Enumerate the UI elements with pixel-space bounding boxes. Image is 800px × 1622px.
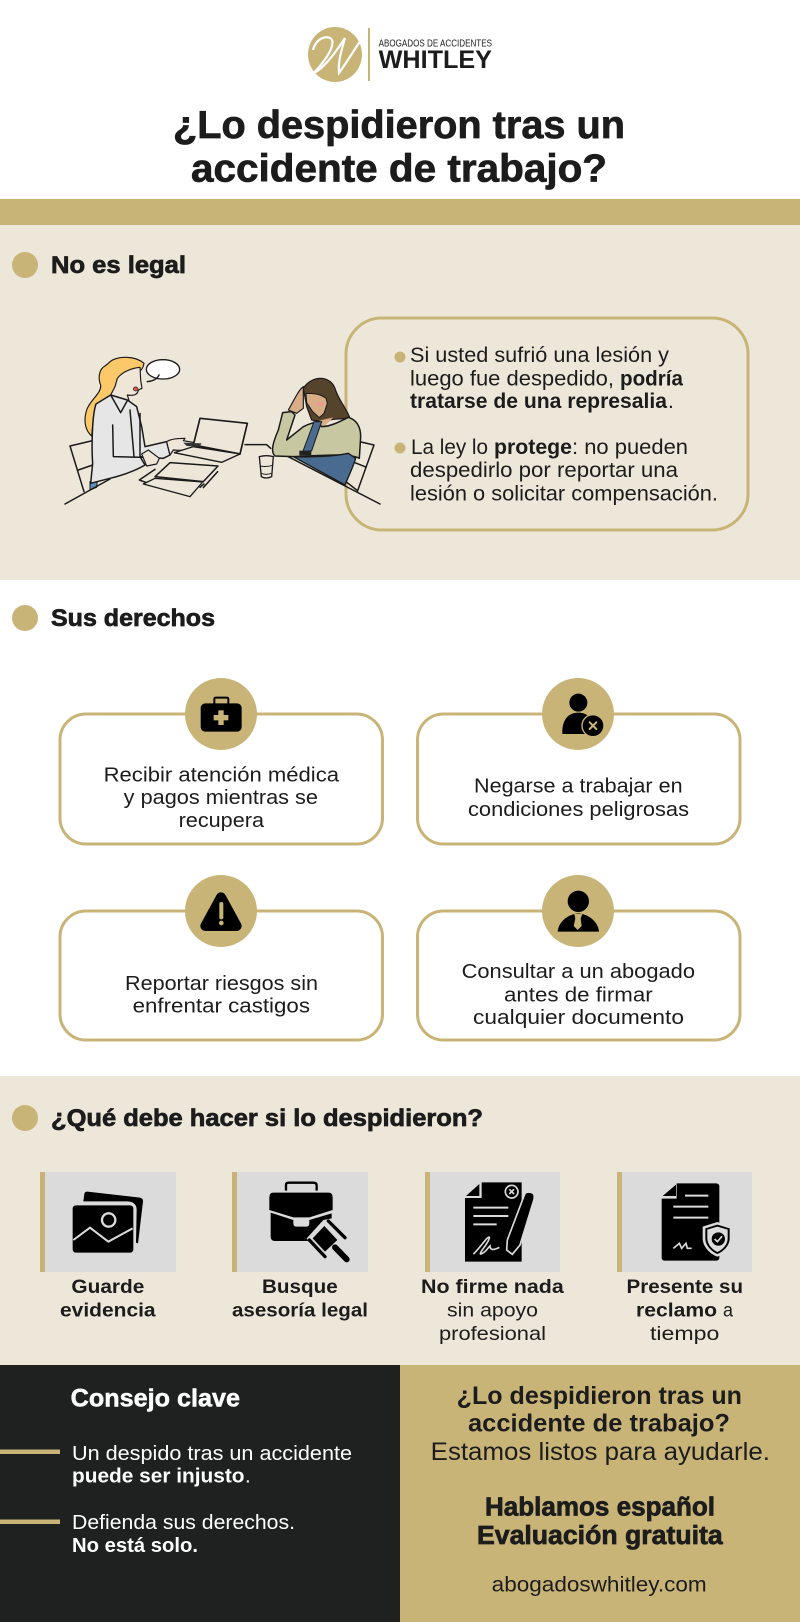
card: condiciones peligrosas [418, 678, 740, 844]
icon: document with pen [465, 1182, 534, 1262]
panel: consejo clave: Un despido tras un accidente [72, 1442, 352, 1465]
card: consultar abogado: Consultar a un abogado [462, 960, 695, 983]
panel: no es legal [0, 225, 800, 580]
card: reportar riesgos: enfrentar castigos [133, 995, 310, 1018]
card: atención médica [60, 678, 382, 844]
card: atención médica: y pagos mientras se [124, 786, 318, 809]
callout: legal text: protege [494, 436, 572, 459]
panel: sus derechos [12, 605, 740, 1040]
gold band [0, 199, 800, 225]
panel: consejo clave: Consejo clave [71, 1385, 240, 1413]
icon: papers [139, 463, 218, 497]
callout: legal text: lesión o solicitar compensación. [410, 482, 718, 506]
callout: legal text: despedirlo por reportar una [410, 459, 678, 482]
step: busque asesoría legal: Busque [262, 1276, 338, 1298]
panel: consejo clave: Defienda sus derechos. [72, 1511, 295, 1534]
callout: legal text: Si usted sufrió una lesión y [410, 344, 670, 367]
step: busque asesoría legal: asesoría legal [232, 1300, 368, 1322]
icon: photos [73, 1192, 143, 1253]
card: consultar abogado [418, 875, 740, 1040]
card: consultar abogado: cualquier documento [473, 1006, 684, 1029]
step: no firme nada: profesional [439, 1323, 546, 1345]
panel: contacto: abogadoswhitley.com [492, 1574, 707, 1597]
step: no firme nada [421, 1172, 564, 1345]
panel: contacto: ¿Lo despidieron tras un [457, 1382, 742, 1410]
icon: laptop [174, 418, 247, 462]
card: atención médica: recupera [179, 809, 265, 832]
panel: contacto: Hablamos español [485, 1494, 715, 1522]
step: presente su reclamo: reclamo [636, 1300, 717, 1322]
callout: legal text: La ley lo [411, 436, 488, 459]
step: guarde evidencia: Guarde [71, 1276, 145, 1298]
panel: qué debe hacer [0, 1076, 800, 1365]
panel: contacto: Estamos listos para ayudarle. [431, 1438, 770, 1466]
step: guarde evidencia: evidencia [60, 1300, 156, 1322]
logo [308, 27, 492, 82]
icon: person with tie [558, 891, 599, 932]
icon: glass of water [259, 456, 273, 478]
step: presente su reclamo [617, 1172, 752, 1345]
icon: speech bubble [146, 360, 180, 382]
callout: legal text: . [668, 390, 674, 413]
title: accidente de trabajo? [191, 148, 607, 190]
step: presente su reclamo: a [723, 1300, 733, 1322]
title [173, 104, 625, 190]
callout: legal text: tratarse de una represalia [410, 390, 667, 413]
heading: qué debe hacer: ¿Qué debe hacer si lo despidieron? [51, 1105, 483, 1132]
icon: briefcase and gavel [269, 1183, 347, 1259]
callout: legal text: luego fue despedido, [410, 368, 614, 390]
panel: contacto: accidente de trabajo? [468, 1410, 730, 1438]
panel: consejo clave [0, 1365, 400, 1622]
callout: legal text: podría [620, 368, 683, 390]
icon: document with shield [662, 1183, 732, 1261]
callout: legal text: : no pueden [572, 436, 688, 459]
step: busque asesoría legal [232, 1172, 368, 1322]
heading: sus derechos: Sus derechos [51, 605, 215, 632]
illustration: meeting at table [65, 357, 380, 504]
logo: ABOGADOS DE ACCIDENTES [379, 39, 492, 50]
panel: consejo clave: . [245, 1465, 251, 1488]
title: ¿Lo despidieron tras un [173, 104, 625, 147]
panel: consejo clave: No está solo. [72, 1534, 198, 1557]
panel: consejo clave: puede ser injusto [72, 1465, 244, 1488]
step: presente su reclamo: tiempo [650, 1323, 720, 1345]
card: reportar riesgos [60, 875, 382, 1040]
icon: first aid kit [201, 698, 242, 732]
step: presente su reclamo: Presente su [626, 1276, 743, 1298]
card: condiciones peligrosas: Negarse a trabajar en [474, 775, 683, 798]
card: reportar riesgos: Reportar riesgos sin [125, 972, 318, 995]
card: atención médica: Recibir atención médica [104, 764, 340, 787]
step: no firme nada: sin apoyo [447, 1300, 538, 1322]
card: condiciones peligrosas: condiciones peligrosas [468, 798, 689, 821]
step: no firme nada: No firme nada [421, 1276, 564, 1298]
callout: legal text [346, 318, 748, 530]
panel: contacto [400, 1365, 800, 1622]
logo: WHITLEY [379, 46, 492, 74]
heading: no es legal: No es legal [51, 252, 186, 279]
icon: person with x [562, 694, 604, 737]
panel: contacto: Evaluación gratuita [477, 1522, 724, 1550]
card: consultar abogado: antes de firmar [504, 984, 653, 1007]
icon: warning triangle [205, 897, 237, 926]
step: guarde evidencia [40, 1172, 176, 1322]
